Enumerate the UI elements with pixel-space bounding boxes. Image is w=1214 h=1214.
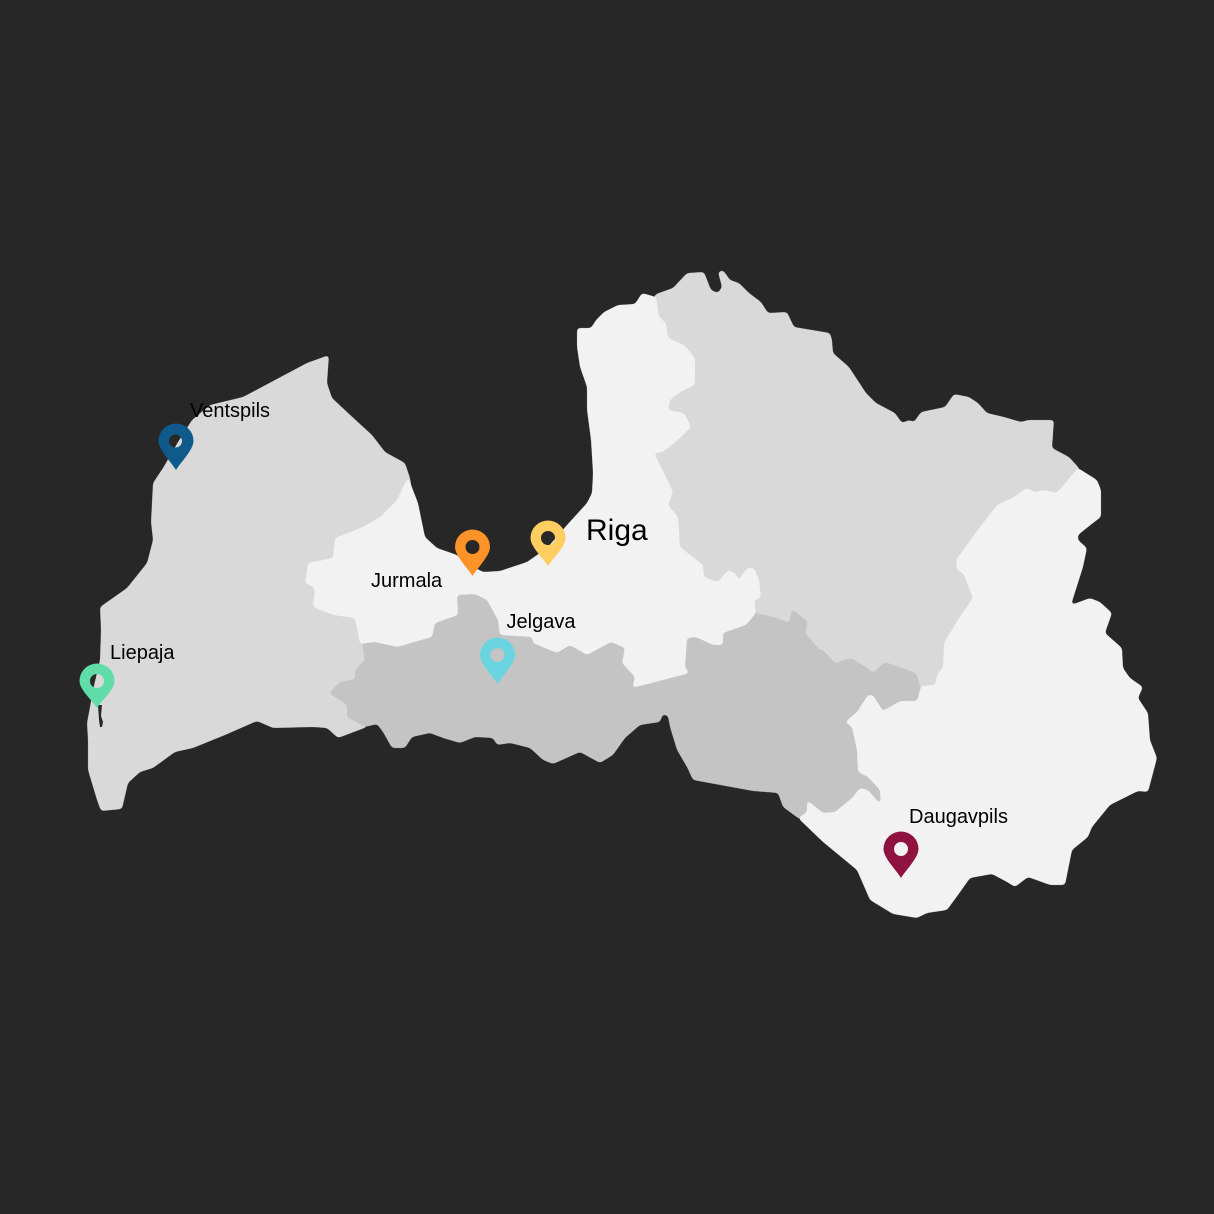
pin: Jelgava (480, 638, 515, 684)
region: Kurzeme (87, 355, 420, 811)
region: Vidzeme (640, 270, 1082, 692)
pin: Riga (530, 520, 566, 566)
pin: Ventspils (158, 424, 194, 470)
label: Ventspils: Ventspils (190, 400, 270, 422)
region: Riga and Jurmala (305, 293, 761, 688)
pin: Jurmala (455, 530, 490, 576)
pin: Liepaja (80, 664, 114, 708)
pin: Daugavpils (884, 832, 918, 878)
label: Jelgava: Jelgava (506, 611, 576, 633)
label: Jurmala: Jurmala (371, 570, 443, 592)
label: Daugavpils: Daugavpils (909, 806, 1008, 828)
region: Zemgale (329, 585, 925, 825)
region: Latgale (798, 468, 1157, 918)
label: Riga: Riga (586, 514, 648, 547)
label: Liepaja: Liepaja (110, 642, 175, 664)
lake near Liepaja (98, 705, 103, 727)
